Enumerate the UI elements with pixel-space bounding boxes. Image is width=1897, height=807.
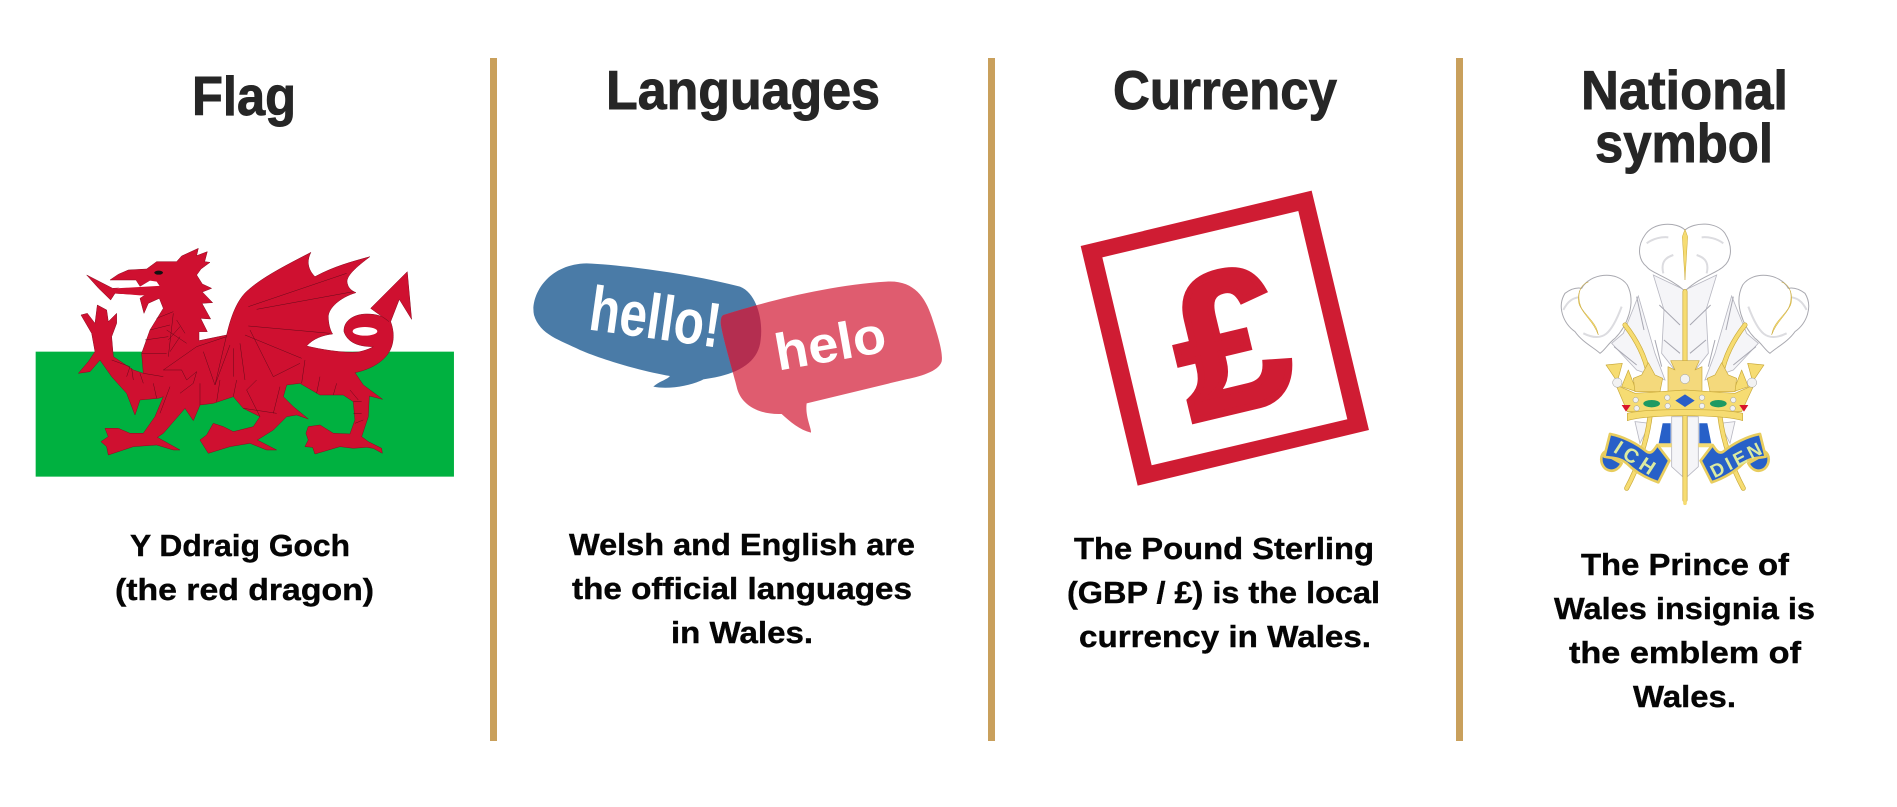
caption: currency: The Pound Sterling (1074, 531, 1374, 566)
side feathers (1612, 275, 1758, 477)
heading: National symbol: National (1581, 59, 1788, 121)
gold quills (1625, 292, 1745, 500)
plumes (1561, 224, 1809, 353)
caption: national symbol: The Prince of (1581, 547, 1790, 582)
caption: national symbol: the emblem of (1569, 635, 1802, 670)
caption: currency: (GBP / £) is the local (1067, 575, 1380, 610)
caption: national symbol: Wales insignia is (1554, 591, 1815, 626)
icon: speech bubbles (533, 263, 942, 433)
caption: national symbol: Wales. (1633, 679, 1736, 714)
heading: Flag: Flag (192, 65, 296, 127)
icon: pound sign in tilted frame (1081, 191, 1369, 486)
red speech bubble (721, 282, 942, 433)
caption: currency (1067, 531, 1380, 654)
panel: currency (1067, 59, 1380, 654)
jewels and pearls (1613, 374, 1757, 412)
caption: languages: in Wales. (671, 615, 813, 650)
word: hello!: hello! (585, 274, 725, 362)
bubble overlap (720, 305, 762, 372)
panel: national symbol (1554, 59, 1815, 714)
flag of Wales (36, 248, 454, 477)
panel: languages (533, 59, 942, 650)
heading: Languages: Languages (606, 59, 880, 121)
crown (1606, 361, 1764, 421)
caption: languages: Welsh and English are (569, 527, 915, 562)
icon: red dragon (78, 248, 412, 455)
caption: currency: currency in Wales. (1079, 619, 1371, 654)
caption: languages: the official languages (572, 571, 912, 606)
caption: flag (115, 528, 374, 607)
heading: National symbol (1581, 59, 1788, 174)
heading: Currency: Currency (1113, 59, 1337, 121)
caption: languages (569, 527, 915, 650)
scroll: ICH (1601, 434, 1669, 482)
icon: pound sign in tilted frame: £ (1150, 221, 1309, 462)
caption: national symbol (1554, 547, 1815, 714)
blue pieces (1658, 423, 1712, 445)
blue speech bubble (533, 263, 761, 388)
scroll: ICH: ICH (1610, 437, 1659, 480)
icon: Prince of Wales feathers (1561, 224, 1809, 503)
scroll: DIEN: DIEN (1707, 438, 1765, 482)
word: helo: helo (770, 305, 890, 381)
heading: National symbol: symbol (1595, 112, 1773, 174)
caption: flag: Y Ddraig Goch (130, 528, 350, 563)
panel: flag (36, 65, 454, 607)
caption: flag: (the red dragon) (115, 572, 374, 607)
